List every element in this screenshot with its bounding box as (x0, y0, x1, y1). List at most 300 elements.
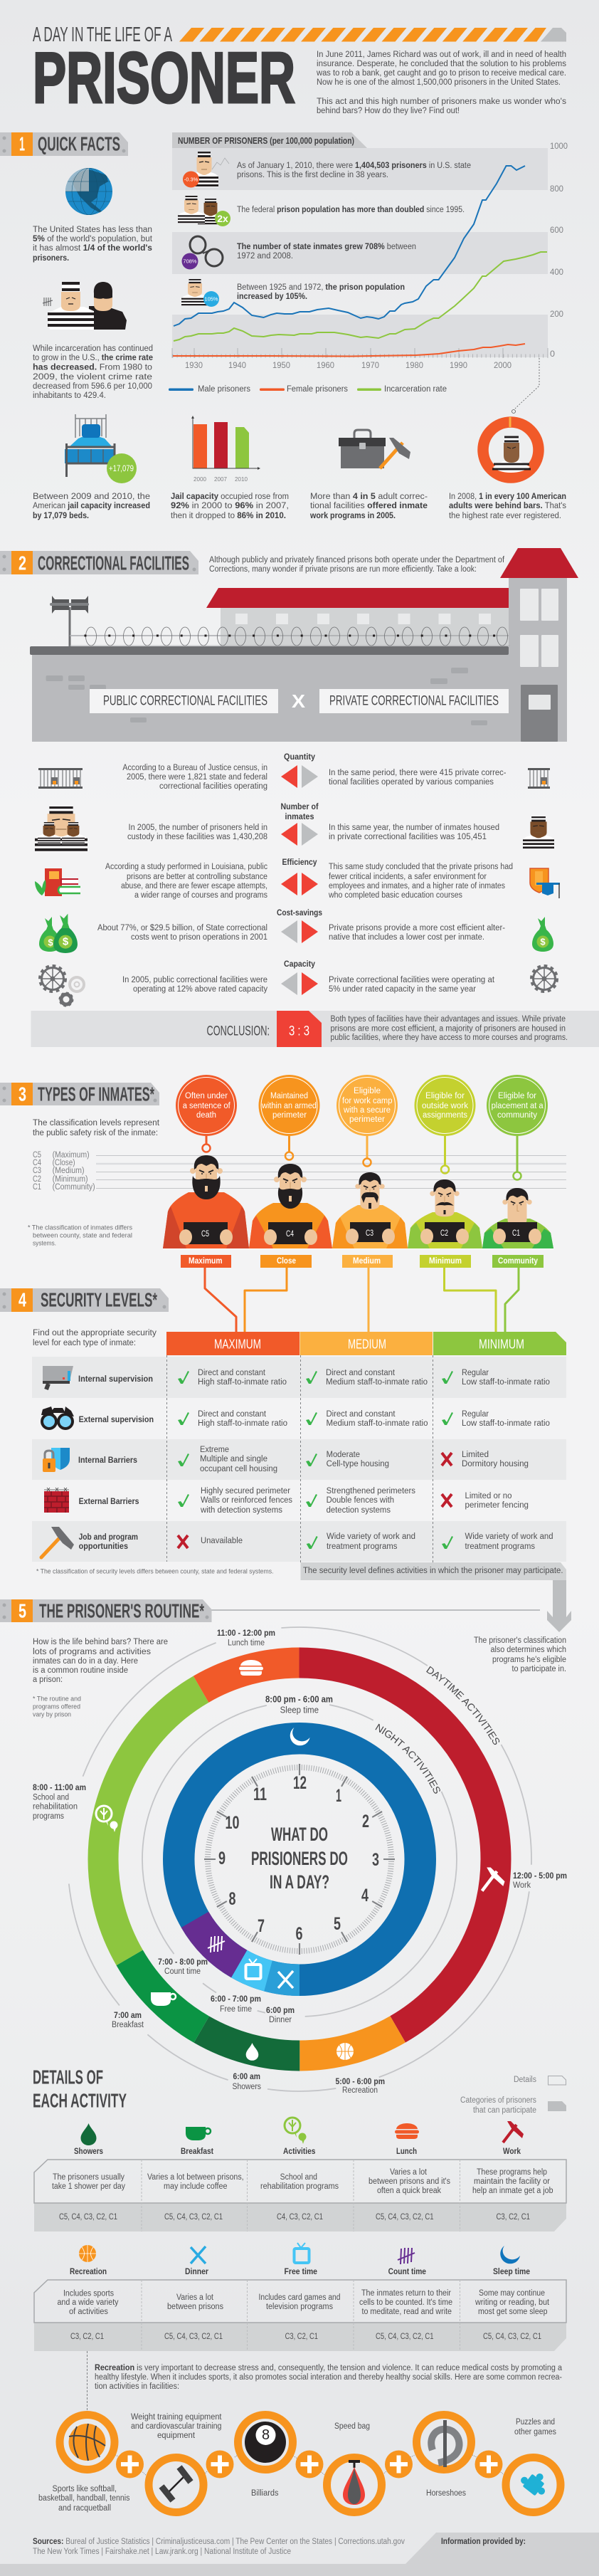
section heading tab: 4 (18, 1288, 26, 1311)
time label: count: Count time (164, 1967, 201, 1976)
text: public: operating at 12% above rated capacity (133, 985, 267, 994)
time label: sleep: Sleep time (280, 1704, 319, 1715)
time label: showers: Showers (232, 2083, 261, 2091)
recreation captions: and cardiovascular training (131, 2422, 222, 2431)
cells: C5, C4, C3, C2, C1 (376, 2213, 434, 2222)
row: internal barriers: Moderate (327, 1451, 360, 1459)
icon: shield and graduation cap (530, 868, 560, 898)
cells: of activities (69, 2308, 108, 2316)
footnote: programs offered (33, 1703, 80, 1711)
activity names: row one: Activities (283, 2146, 316, 2156)
text: four fact captions: In 2008, 1 in every 100 American (449, 493, 566, 501)
heading (33, 2066, 127, 2111)
activity names: row one: Breakfast (181, 2146, 213, 2156)
level labels: C2 (33, 1175, 41, 1184)
text: four fact captions: adults were behind bars. That's (449, 502, 566, 510)
comparison: cost-savings: Cost-savings (277, 908, 322, 918)
inmate: C4 close: C4 (286, 1229, 294, 1239)
cells: Some may continue (479, 2289, 545, 2298)
icon: moon (290, 1728, 310, 1745)
time label: breakfast (112, 2012, 144, 2029)
icon: moon (500, 2246, 520, 2264)
fact row: state prisoners: prisons. This is the first decline in 38 years. (237, 171, 388, 179)
text: public: In 2005, public correctional facilities were (122, 976, 267, 984)
fact row: state inmates: 708% (183, 258, 197, 265)
icon: basketball (336, 2043, 354, 2060)
balloon: community: community (497, 1111, 537, 1120)
y axis labels: 1000 (550, 142, 568, 151)
text: crime rate: While incarceration has continued (33, 345, 153, 353)
row: external barriers: Double fences with (327, 1496, 394, 1505)
activity names: row one: Work (503, 2146, 521, 2156)
level tag: community (492, 1255, 544, 1268)
row: internal barriers: Cell-type housing (327, 1460, 389, 1468)
chart: night activities ring (179, 1738, 420, 1980)
inmate: C1 community: C1 (512, 1228, 520, 1238)
main building (221, 608, 509, 648)
level tag: close: Close (277, 1257, 296, 1266)
time label: work (513, 1872, 567, 1890)
text: private: In this same year, the number of inmates housed (329, 824, 499, 832)
section 4: security levels (0, 1288, 571, 1632)
recreation chain (60, 2414, 561, 2513)
footnote: * The routine and (33, 1696, 81, 1703)
circle: billiards (238, 2414, 293, 2470)
section heading tab (0, 551, 198, 574)
intro text: level for each type of inmate: (33, 1339, 136, 1347)
icon: coffee cup (151, 1992, 176, 2006)
text: public: prisons are better at controlling substance (127, 873, 267, 881)
text: four fact captions: American jail capacity increased (33, 502, 150, 510)
intro text: In June 2011, James Richard was out of work, ill and in need of health (317, 51, 566, 59)
recreation text: tion activities in facilities: (95, 2382, 179, 2391)
cells: between prisons and it's (369, 2177, 450, 2186)
comparison: capacity: Capacity (284, 959, 315, 969)
level tag: minimum: Minimum (429, 1257, 462, 1266)
cells: C5, C4, C3, C2, C1 (164, 2213, 223, 2222)
text: private: native that includes a lower cost per inmate. (329, 933, 484, 942)
balloon: medium: with a secure (343, 1106, 391, 1115)
activity names: row one: Showers (74, 2146, 103, 2156)
icon: gears public (40, 966, 84, 1006)
row: internal barriers: Internal Barriers (78, 1455, 137, 1465)
section heading tab (0, 1599, 212, 1622)
score box (277, 1011, 322, 1047)
tower (509, 578, 567, 742)
thin label arcs (68, 1627, 531, 2091)
text: private: in private correctional facilities was 105,451 (329, 833, 487, 841)
cells: writing or reading, but (475, 2298, 550, 2307)
icon: jail cell private (528, 768, 550, 789)
recreation captions: Speed bag (334, 2422, 370, 2431)
circle: horseshoes (417, 2414, 471, 2470)
icon: bed (65, 414, 137, 483)
intro text: Find out the appropriate security (33, 1329, 157, 1337)
recreation text: healthy lifestyle. When it includes sports, it also promotes social interation and thereby healthy social skills. Here are some common recrea- (95, 2373, 562, 2382)
text: crime rate: 2009, the violent crime rate (33, 373, 152, 382)
text: four fact captions (33, 493, 566, 520)
time label: breakfast: 7:00 am (114, 2012, 142, 2020)
cells: The inmates return to their (361, 2289, 451, 2298)
cells: to meditate, read and write (361, 2308, 452, 2316)
balloon: medium: perimeter (349, 1115, 385, 1124)
intro text: How is the life behind bars? There are (33, 1638, 168, 1646)
comparison: quantity: Quantity (284, 752, 315, 762)
cells: between prisons (167, 2303, 223, 2311)
section heading tab (0, 1083, 159, 1105)
title line: a day in the life of a: A DAY IN THE LIFE OF A (33, 23, 172, 46)
row: internal supervision: Regular (462, 1369, 489, 1377)
intro text: Corrections, many wonder if private prisons are run more efficiently. Take a look: (209, 565, 477, 574)
section 5: the prisoner's routine (0, 1599, 567, 2095)
fact row: state prisoners (183, 152, 471, 188)
table one (34, 2160, 566, 2231)
time label: free time (211, 1995, 261, 2014)
icon: money bag (532, 917, 553, 952)
x axis labels: 2000 (494, 362, 511, 370)
text: private: fewer critical incidents, a safer environment for (329, 873, 487, 881)
activity names: row two: Sleep time (493, 2266, 530, 2276)
text: private: employees and inmates, and a higher rate of inmates (329, 882, 505, 890)
table header (166, 1332, 566, 1355)
comparison: efficiency (35, 857, 560, 900)
circle: billiards: 8 (262, 2427, 270, 2443)
section 1: quick facts (0, 132, 568, 520)
section heading tab: THE PRISONER'S ROUTINE* (39, 1600, 204, 1621)
activity icons: row two (79, 2243, 520, 2264)
intro text: the public safety risk of the inmate: (33, 1129, 158, 1137)
row: internal barriers (43, 1446, 529, 1473)
time label: school: 8:00 - 11:00 am (33, 1784, 86, 1792)
label: public vs private: PRIVATE CORRECTIONAL FACILITIES (329, 693, 499, 709)
inmate: C1 community (482, 1188, 553, 1248)
legend: Details (514, 2076, 536, 2084)
balloon: community: Eligible for (498, 1092, 536, 1100)
text: four fact captions: Between 2009 and 2010, the (33, 493, 150, 501)
text: public: custody in these facilities was 1,430,208 (127, 833, 267, 841)
intro text (316, 51, 566, 115)
balloon: medium: Eligible (354, 1087, 381, 1095)
footnote: between county, state and federal (33, 1231, 132, 1240)
row: job and program opportunities: treatment programs (465, 1542, 535, 1551)
fact row: population increase: increased by 105%. (237, 293, 307, 301)
inmate: C2 minimum: C2 (440, 1228, 448, 1238)
circle: puzzles (506, 2457, 561, 2513)
text: world share: The United States has less than (33, 226, 152, 234)
cells: maintain the facility or (474, 2177, 550, 2186)
clock numbers: 3 (372, 1850, 379, 1870)
icon: jail cells public (38, 768, 83, 789)
level labels: C3 (33, 1167, 41, 1175)
icon: gear private (531, 966, 557, 992)
conclusion text: public facilities, where they have access to more courses and programs. (330, 1034, 568, 1042)
level tag: minimum (420, 1255, 471, 1268)
y axis labels: 0 (550, 350, 555, 359)
chart: 1 in 100 ring with prisoner (483, 358, 539, 478)
plus (385, 2450, 413, 2478)
score arrows (281, 765, 318, 788)
intro text (33, 1329, 157, 1347)
time label: count (158, 1958, 208, 1976)
icon: binoculars (41, 1407, 74, 1430)
clock numbers: 5 (334, 1914, 341, 1934)
text: public: abuse, and there are fewer escape attempts, (121, 882, 267, 890)
fact row: population increase (181, 279, 405, 307)
row: external supervision: Regular (462, 1410, 489, 1419)
header (33, 23, 566, 118)
recreation captions: Sports like softball, (53, 2485, 117, 2493)
row: external supervision: Low staff-to-inmate ratio (462, 1419, 550, 1428)
time label: dinner: 6:00 pm (266, 2007, 295, 2015)
text: private (328, 863, 513, 900)
score box: 3 : 3 (289, 1024, 309, 1039)
time label: free time: Free time (220, 2005, 252, 2014)
level labels: C4 (33, 1159, 41, 1167)
fact row: state prisoners: -0.3% (184, 177, 198, 182)
icon: bed: +17,079 (109, 463, 134, 473)
balloon: maximum: death (196, 1111, 216, 1120)
recreation captions: Weight training equipment (131, 2413, 222, 2422)
icon: fork and knife (278, 1971, 293, 1988)
row: external supervision: High staff-to-inmate ratio (198, 1419, 287, 1428)
side note: programs he's eligible (492, 1656, 566, 1664)
text: crime rate: inhabitants to 429.4. (33, 391, 106, 400)
time label: school: rehabilitation (33, 1802, 78, 1811)
comparison: efficiency: Efficiency (282, 857, 317, 867)
text: public: a wider range of courses and programs (134, 891, 267, 900)
connectors to security levels (205, 1268, 519, 1332)
ring connector (512, 358, 539, 413)
text: private: who completed basic education courses (328, 891, 462, 900)
inmate: C5 maximum: C5 (201, 1229, 209, 1239)
text: crime rate: decreased from 596.6 per 10,000 (33, 382, 152, 391)
time label: school: School and (33, 1794, 69, 1802)
icon: television (246, 1959, 260, 1979)
comparison: cost-savings (39, 908, 553, 953)
icon: two prisoners (43, 282, 127, 330)
text: four fact captions: Jail capacity occupied rose from (171, 493, 289, 501)
clock title: IN A DAY? (270, 1871, 329, 1893)
text: public: According a study performed in Louisiana, public (105, 863, 267, 871)
illustration: prison building (30, 548, 578, 742)
row: internal supervision: Internal supervision (78, 1374, 153, 1384)
row: job and program opportunities: Wide variety of work and (327, 1533, 415, 1541)
heading: DETAILS OF (33, 2066, 103, 2088)
comparison: quantity (38, 752, 550, 791)
recreation captions: Billiards (251, 2489, 279, 2498)
legend: Male prisoners (198, 385, 250, 394)
time label: showers: 6:00 am (233, 2073, 260, 2081)
footnote (28, 1224, 132, 1247)
row: internal barriers: Limited (462, 1451, 489, 1459)
details of each activity (33, 2066, 566, 2513)
level tag: medium (342, 1255, 393, 1268)
cells: and a wide variety (57, 2298, 119, 2307)
row: external barriers: with detection systems (200, 1506, 282, 1515)
row: external barriers: External Barriers (79, 1496, 139, 1506)
activity names: row two (70, 2266, 530, 2276)
chart: jail capacity bars: 2010 (235, 475, 248, 483)
text: world share: it has almost 1/4 of the world's (33, 244, 152, 253)
section heading tab: TYPES OF INMATES* (38, 1083, 154, 1105)
level labels: (Maximum) (53, 1151, 90, 1160)
legend: Incarceration rate (384, 385, 447, 394)
row: external barriers: Strengthened perimeters (327, 1487, 415, 1495)
section heading tab: 2 (18, 552, 26, 574)
time label: work: Work (513, 1881, 531, 1890)
row: job and program opportunities: Unavailable (201, 1537, 243, 1545)
section heading tab: 3 (18, 1083, 26, 1105)
x axis labels: 1960 (317, 362, 334, 370)
icon: money bag: $ (540, 937, 546, 947)
time label: sleep (265, 1694, 333, 1715)
text: public (127, 824, 267, 841)
intro text: The classification levels represent (33, 1119, 160, 1127)
level tag: maximum: Maximum (189, 1257, 222, 1266)
intro text: behind bars? How do they live? Find out! (317, 107, 460, 115)
chart: jail capacity bars: 2007 (214, 475, 227, 483)
row: external barriers: Walls or reinforced fences (201, 1496, 292, 1505)
plus (475, 2450, 502, 2478)
title: prisoner: PRISONER (33, 38, 295, 118)
activity names: row two: Dinner (185, 2266, 208, 2276)
row: internal supervision: Low staff-to-inmate ratio (462, 1378, 550, 1387)
x axis labels (185, 362, 511, 370)
cells: C5, C4, C3, C2, C1 (376, 2333, 434, 2341)
section heading tab: SECURITY LEVELS* (41, 1288, 157, 1311)
footnote: systems. (33, 1240, 56, 1247)
row: internal supervision: Medium staff-to-inmate ratio (326, 1378, 428, 1387)
comparison: number of inmates: Number of (280, 801, 319, 811)
icon: activities (96, 1806, 118, 1832)
text: four fact captions: then it dropped to 86% in 2010. (171, 512, 286, 520)
text: public: About 77%, or $29.5 billion, of State correctional (97, 924, 267, 932)
intro text: lots of programs and activities (33, 1648, 151, 1656)
cells: take 1 shower per day (52, 2182, 125, 2191)
chart title tab (172, 132, 367, 148)
chart bands (172, 148, 548, 357)
icon: two money bags: $ (48, 937, 53, 948)
balloon: minimum: outside work (422, 1102, 468, 1110)
cells: C3, C2, C1 (285, 2333, 318, 2341)
conclusion text: Both types of facilities have their advantages and issues. While private (330, 1015, 566, 1024)
footnote: * The classification of security levels differs between county, state and federal systems. (36, 1567, 273, 1576)
wall (32, 651, 509, 742)
cells: Varies a lot between prisons, (147, 2173, 244, 2182)
comparison: number of inmates (35, 801, 554, 852)
time label: school (33, 1784, 86, 1821)
fact row: state inmates: 1972 and 2008. (237, 252, 293, 261)
legend: that can participate (473, 2106, 536, 2115)
recreation captions: basketball, handball, tennis (38, 2494, 130, 2503)
time label: dinner: Dinner (269, 2016, 292, 2024)
time label: work: 12:00 - 5:00 pm (513, 1872, 567, 1881)
time label: showers (232, 2073, 261, 2091)
height chart lines (96, 1156, 566, 1189)
inmate: C3 medium (332, 1172, 408, 1248)
icon: water drop (246, 2043, 258, 2061)
clock numbers: 10 (225, 1813, 239, 1833)
clock numbers: 1 (336, 1786, 341, 1806)
comparison: number of inmates: inmates (285, 811, 314, 821)
cells: Includes sports (63, 2289, 114, 2298)
badge (107, 453, 137, 483)
cells: Includes card games and (259, 2293, 340, 2302)
ring icons (96, 1660, 505, 2061)
conclusion text (330, 1015, 568, 1042)
text: private (329, 824, 499, 841)
text: public (97, 924, 267, 942)
clock numbers: 7 (258, 1916, 265, 1936)
time label: recreation (336, 2078, 385, 2095)
balloon: close: Maintained (270, 1092, 308, 1100)
callout: security level defines activities (300, 1562, 566, 1580)
text: public: 2005, there were 1,821 state and federal (127, 773, 267, 782)
row: job and program opportunities: Wide variety of work and (465, 1533, 553, 1541)
icon: hammer (503, 2121, 524, 2143)
row: external supervision: External supervision (79, 1414, 154, 1424)
recreation captions: other games (514, 2428, 556, 2436)
table two (34, 2280, 566, 2351)
text: world share: prisoners. (33, 254, 69, 263)
searchlight speakers (50, 596, 89, 646)
row: job and program opportunities: Job and program (79, 1532, 138, 1542)
icon: fork and knife (191, 2246, 206, 2264)
panel: number of prisoners chart (169, 132, 568, 394)
chart: jail capacity bars: 2000 (194, 475, 206, 483)
row: external supervision (41, 1407, 550, 1430)
chart: jail capacity bars (191, 416, 260, 483)
row: internal supervision: High staff-to-inmate ratio (198, 1378, 287, 1387)
inmate: C3 medium: C3 (366, 1228, 373, 1238)
intro text: Although publicly and privately financed prisons both operate under the Department of (209, 556, 505, 564)
fact row: state inmates: The number of state inmates grew 708% between (237, 243, 416, 251)
clock numbers: 6 (296, 1924, 303, 1944)
icon: hammer (482, 1868, 505, 1891)
balloon: community (487, 1075, 548, 1180)
text: public (122, 764, 267, 791)
x axis ticks (172, 348, 548, 358)
time label: lunch: 11:00 - 12:00 pm (217, 1629, 275, 1638)
activity names: row two: Count time (388, 2266, 426, 2276)
row: external supervision: Direct and constant (326, 1410, 396, 1419)
intro text: This act and this high number of prisoners make us wonder who's (317, 98, 566, 106)
balloon: maximum: Often under (185, 1092, 228, 1100)
icon: three prisoners (35, 806, 88, 852)
time label: free time: 6:00 - 7:00 pm (211, 1995, 261, 2004)
level labels: (Medium) (53, 1167, 85, 1175)
text: four fact captions: by 17,079 beds. (33, 512, 89, 520)
level tag: maximum (181, 1255, 231, 1268)
level labels (33, 1151, 95, 1192)
side note: to participate in. (512, 1665, 566, 1673)
information credit: Information provided by: (441, 2538, 526, 2546)
score arrows (281, 823, 318, 846)
balloon: close (259, 1075, 320, 1160)
icon: television (295, 2243, 309, 2263)
activity names: row one (74, 2146, 521, 2156)
text: world share (33, 226, 153, 263)
time label: school: programs (33, 1812, 64, 1821)
conclusion text: prisons are more cost efficient, a majority of prisoners are housed in (330, 1025, 566, 1034)
activity names: row two: Free time (285, 2266, 317, 2276)
curved label: daytime activities: DAYTIME ACTIVITIES (426, 1666, 499, 1745)
row: external barriers: detection systems (327, 1506, 391, 1515)
fact row: federal prisoners (178, 196, 465, 226)
intro text: insurance. Desperate, he concluded that the solution to his problems (317, 60, 566, 68)
fact row: state inmates (182, 236, 416, 269)
balloon: minimum: Eligible for (425, 1092, 465, 1100)
